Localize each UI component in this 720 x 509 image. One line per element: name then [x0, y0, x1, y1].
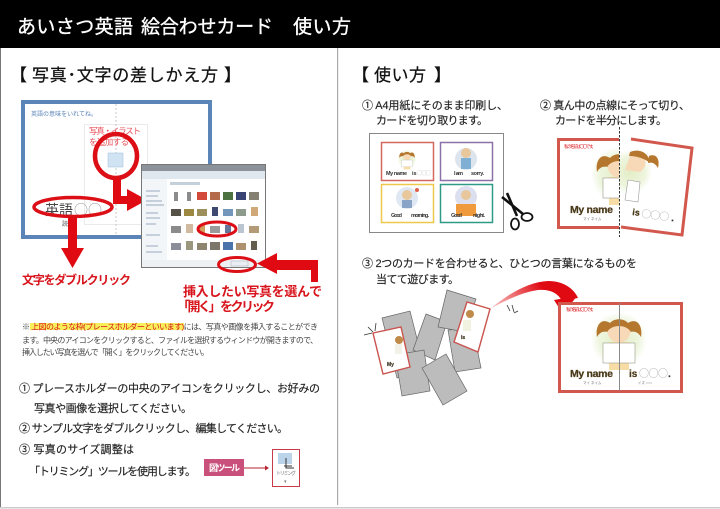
caption: double click: 文字をダブルクリック: [22, 272, 131, 287]
highlight: [30, 323, 184, 330]
matched card: is: [629, 369, 638, 380]
heading: how to use: [352, 65, 451, 85]
card: good night: Good: [451, 213, 462, 219]
heading: replace photos and text: 】: [224, 66, 241, 85]
red ellipse: selected photo: [198, 222, 236, 236]
placeholder note: [22, 322, 318, 357]
caption: insert photo: [177, 284, 322, 314]
printed sheet: [370, 134, 504, 232]
numbered instructions: ① プレースホルダーの中央のアイコンをクリックし、お好みの: [19, 381, 320, 395]
numbered instructions: ③ 写真のサイズ調整は: [19, 442, 134, 456]
heading: replace photos and text: 写真･文字の差しかえ方: [32, 66, 218, 85]
title: 使い方: [293, 16, 351, 38]
numbered instructions: 写真や画像を選択してください。: [34, 401, 192, 415]
right half: is: [632, 207, 640, 218]
matched card: [560, 303, 682, 392]
step 3 text: [362, 256, 637, 286]
step 3 text: 当てて遊びます。: [376, 272, 459, 286]
sample word: [45, 200, 102, 228]
red arrow: to open button: [257, 253, 318, 282]
face-up card left: My: [387, 362, 394, 368]
card: good morning: morning.: [411, 213, 429, 219]
trimming button: [272, 450, 300, 486]
numbered instructions: 「トリミング」ツールを使用します。: [29, 464, 196, 478]
card: i am sorry: [440, 142, 492, 180]
placeholder note: ます。中央のアイコンをクリックすると、ファイルを選択するウィンドウが開きますので、: [22, 335, 318, 345]
heading: how to use: 】: [434, 66, 451, 85]
blue slide frame: [23, 102, 210, 237]
sparkle left: [364, 323, 376, 335]
title: 絵合わせカード: [141, 16, 273, 38]
red ellipse: icon: [95, 134, 137, 178]
matched card: My name: [570, 368, 613, 380]
caption: insert photo: 「開く」 をクリック: [177, 299, 275, 314]
blue slide frame: 英語の意味をいれてね。: [31, 110, 97, 118]
card: good night: night.: [473, 213, 485, 219]
heading: how to use: 【: [352, 66, 369, 85]
icon: scissors: [502, 193, 532, 230]
picture tools tab: 図ツール: [209, 463, 240, 473]
face-up card right: [454, 302, 490, 352]
sample word: 英語: [45, 202, 73, 218]
arrow to trimming tool: [244, 466, 269, 470]
numbered instructions: [19, 381, 320, 478]
matched card: イズ ○○○: [638, 380, 652, 385]
heading: replace photos and text: 【: [10, 66, 27, 85]
card: i am sorry: I am: [454, 171, 463, 177]
step 2 text: カードを半分にします。: [555, 113, 667, 127]
step 3 text: ③ 2つのカードを合わせると、ひとつの言葉になるものを: [362, 256, 637, 270]
card: good morning: Good: [391, 213, 402, 219]
step 1 text: [362, 98, 508, 127]
matched card: ○○○: [639, 365, 668, 380]
left half: [558, 140, 647, 228]
thumbnails: [171, 192, 259, 250]
card: my name: [382, 142, 434, 180]
red arrow: down to caption: [61, 217, 84, 268]
step 1 text: ① A4用紙にそのまま印刷し、: [362, 98, 508, 112]
left half: 私の名前は〇〇です。: [564, 143, 596, 150]
matched card: 私の名前は〇〇です。: [566, 306, 596, 313]
cut card: [558, 127, 692, 237]
left half: My name: [570, 204, 613, 216]
matched card: .: [668, 369, 671, 380]
scattered cards: [364, 290, 518, 405]
card: i am sorry: sorry.: [471, 171, 484, 177]
face-up card right: is: [461, 335, 465, 341]
step 2 text: [540, 98, 690, 127]
left half: マイ ネイム: [583, 216, 602, 221]
center divider: [337, 48, 338, 505]
face-down cards: [382, 290, 481, 405]
trimming button: トリミング: [276, 470, 296, 477]
red ellipse: text: [34, 198, 112, 216]
sample word: ○○: [74, 200, 102, 220]
placeholder prompt: を追加する: [89, 137, 129, 147]
sparkle right: [507, 305, 518, 313]
step 2 text: ② 真ん中の点線にそって切り、: [540, 98, 690, 112]
file dialog window: [142, 164, 266, 268]
heading: how to use: 使い方: [374, 65, 426, 85]
picture icon: [108, 153, 123, 167]
red ellipse: open button: [218, 258, 256, 272]
card: good morning: [382, 184, 434, 222]
card: good night: [440, 184, 492, 222]
placeholder note: 挿入したい写真を選んで「開く」をクリックしてください。: [22, 347, 209, 357]
trimming button: ▾: [284, 479, 287, 485]
right half: [608, 139, 692, 235]
sample word: 読み: [62, 220, 74, 228]
card: my name: is: [412, 171, 417, 177]
caption: insert photo: 挿入したい写真を選んで: [183, 284, 322, 299]
title: あいさつ英語: [17, 16, 133, 38]
matched card: マイ ネイム: [583, 380, 602, 385]
screenshot diagram: [22, 102, 322, 314]
placeholder note: ※ 上図のような枠(プレースホルダーといいます)には、写真や画像を挿入することができ: [22, 322, 318, 332]
right half: .: [671, 213, 675, 224]
cut line: [618, 127, 620, 237]
placeholder prompt: [89, 126, 141, 147]
picture tools tab: [204, 459, 244, 476]
title bar: [0, 0, 720, 48]
red arrow: icon to window: [113, 178, 147, 211]
numbered instructions: ② サンプル文字をダブルクリックし、編集してください。: [19, 421, 288, 435]
curved red arrow: [490, 281, 578, 314]
title: [17, 16, 351, 38]
placeholder prompt: 写真・イラスト: [89, 126, 141, 136]
face-up card left: [373, 327, 410, 374]
step 1 text: カードを切り取ります。: [376, 114, 488, 127]
card: my name: ○○○: [417, 169, 431, 177]
card: my name: My name: [386, 171, 407, 177]
right half: ○○○: [641, 205, 670, 223]
